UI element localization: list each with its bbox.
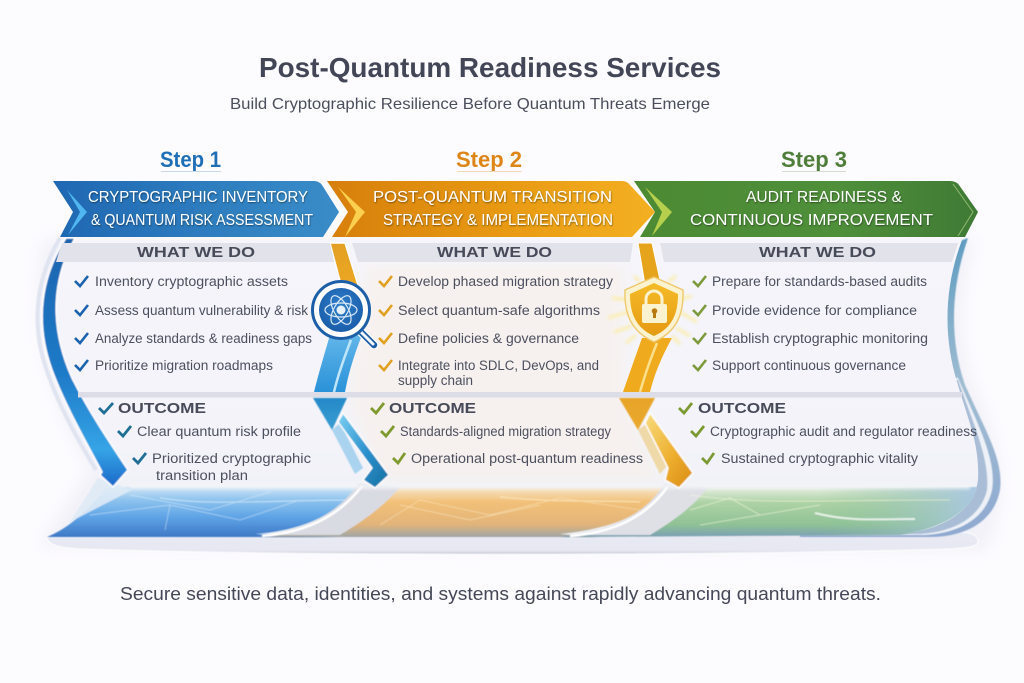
step 2 label: Step 2 xyxy=(456,147,522,172)
banner 3 xyxy=(634,181,978,237)
ribbon: blue lower segment xyxy=(314,335,362,392)
step 3 label: Step 3 xyxy=(781,147,847,172)
panel: step 3 outcome xyxy=(679,400,977,466)
outcome checks xyxy=(371,403,405,463)
heading: WHAT WE DO xyxy=(759,244,876,261)
bottom scene: blue xyxy=(47,478,362,537)
banner 3: AUDIT READINESS & xyxy=(746,189,903,206)
outcome checks xyxy=(679,403,714,463)
outcome checks xyxy=(99,403,146,463)
panel: step 1 what we do: Analyze standards & readiness gaps xyxy=(95,331,312,346)
checklist xyxy=(379,276,392,370)
subtitle: Build Cryptographic Resilience Before Quantum Threats Emerge xyxy=(230,96,710,113)
banner 1 xyxy=(53,181,339,237)
panel backing xyxy=(50,240,978,534)
ribbon: orange upper segment xyxy=(330,243,358,300)
bottom scene: green xyxy=(560,484,977,537)
panel: step 3 what we do xyxy=(693,244,928,373)
soft shadow around the ribbon xyxy=(39,240,999,550)
panel: step 2 outcome xyxy=(371,400,643,466)
banner 2: POST-QUANTUM TRANSITION xyxy=(373,189,612,206)
heading: WHAT WE DO xyxy=(437,244,552,261)
panel: step 1 outcome: Clear quantum risk profile xyxy=(137,424,301,439)
title: Post-Quantum Readiness Services xyxy=(259,52,721,83)
icon: gold shield with padlock xyxy=(608,276,697,344)
fold pieces: orange xyxy=(619,398,693,488)
panel: step 2 what we do: Select quantum-safe algorithms xyxy=(398,303,600,318)
step labels xyxy=(160,147,847,172)
outcome heading: OUTCOME xyxy=(389,400,476,417)
panel: step 3 what we do: Support continuous governance xyxy=(712,358,906,373)
panel: step 3 what we do: Establish cryptographic monitoring xyxy=(712,331,928,346)
banner 1: & QUANTUM RISK ASSESSMENT xyxy=(91,212,313,229)
banner 2: STRATEGY & IMPLEMENTATION xyxy=(383,212,613,229)
divider xyxy=(78,392,962,398)
panel: step 1 what we do: Prioritize migration roadmaps xyxy=(95,358,273,373)
checklist xyxy=(693,276,706,370)
panel: step 2 outcome: Standards-aligned migration strategy xyxy=(400,424,611,439)
ribbon: orange fold segment beneath shield xyxy=(623,338,672,392)
panel: step 2 what we do: supply chain xyxy=(398,373,473,388)
tagline: Secure sensitive data, identities, and systems against rapidly advancing quantum threats. xyxy=(120,584,881,604)
panel: step 3 what we do: Provide evidence for compliance xyxy=(712,303,917,318)
heading: WHAT WE DO xyxy=(137,244,255,261)
ribbon: orange/green upper segment xyxy=(638,243,660,285)
icon: magnifier with atom xyxy=(311,280,374,345)
panel: step 2 what we do: Develop phased migration strategy xyxy=(398,274,613,289)
panel fade into scene xyxy=(130,484,970,489)
panel: step 2 outcome: Operational post-quantum readiness xyxy=(411,451,643,466)
banner 1: CRYPTOGRAPHIC INVENTORY xyxy=(88,189,308,206)
panel: step 2 what we do: Define policies & governance xyxy=(398,331,579,346)
panel: step 2 what we do: Integrate into SDLC, DevOps, and xyxy=(398,358,599,373)
panel: step 1 outcome: Prioritized cryptographic xyxy=(152,451,311,466)
banner 3: CONTINUOUS IMPROVEMENT xyxy=(690,212,934,229)
right curved outer layers xyxy=(800,238,1001,537)
banner 2 xyxy=(327,181,655,237)
base platform xyxy=(47,532,978,554)
fold pieces: blue xyxy=(313,398,389,488)
panel: step 2 what we do xyxy=(379,244,613,388)
panel: step 1 outcome xyxy=(99,400,311,483)
panel: step 1 what we do: Assess quantum vulnerability & risk xyxy=(95,303,308,318)
panel: step 3 outcome: Sustained cryptographic vitality xyxy=(721,451,918,466)
bottom scene: orange xyxy=(258,484,668,537)
checklist xyxy=(75,276,88,370)
panel: step 1 outcome: transition plan xyxy=(156,468,248,483)
panel: step 1 what we do: Inventory cryptographic assets xyxy=(95,274,288,289)
panel: step 3 what we do: Prepare for standards-based audits xyxy=(712,274,927,289)
panel: step 3 outcome: Cryptographic audit and regulator readiness xyxy=(710,424,977,439)
warm tint: step 2 panel xyxy=(350,265,660,480)
left blue ribbon xyxy=(38,238,128,487)
step 1 label: Step 1 xyxy=(160,147,221,172)
panel: step 1 what we do xyxy=(75,244,312,373)
section header strips xyxy=(56,243,958,262)
outcome heading: OUTCOME xyxy=(698,400,786,417)
outcome heading: OUTCOME xyxy=(118,400,206,417)
